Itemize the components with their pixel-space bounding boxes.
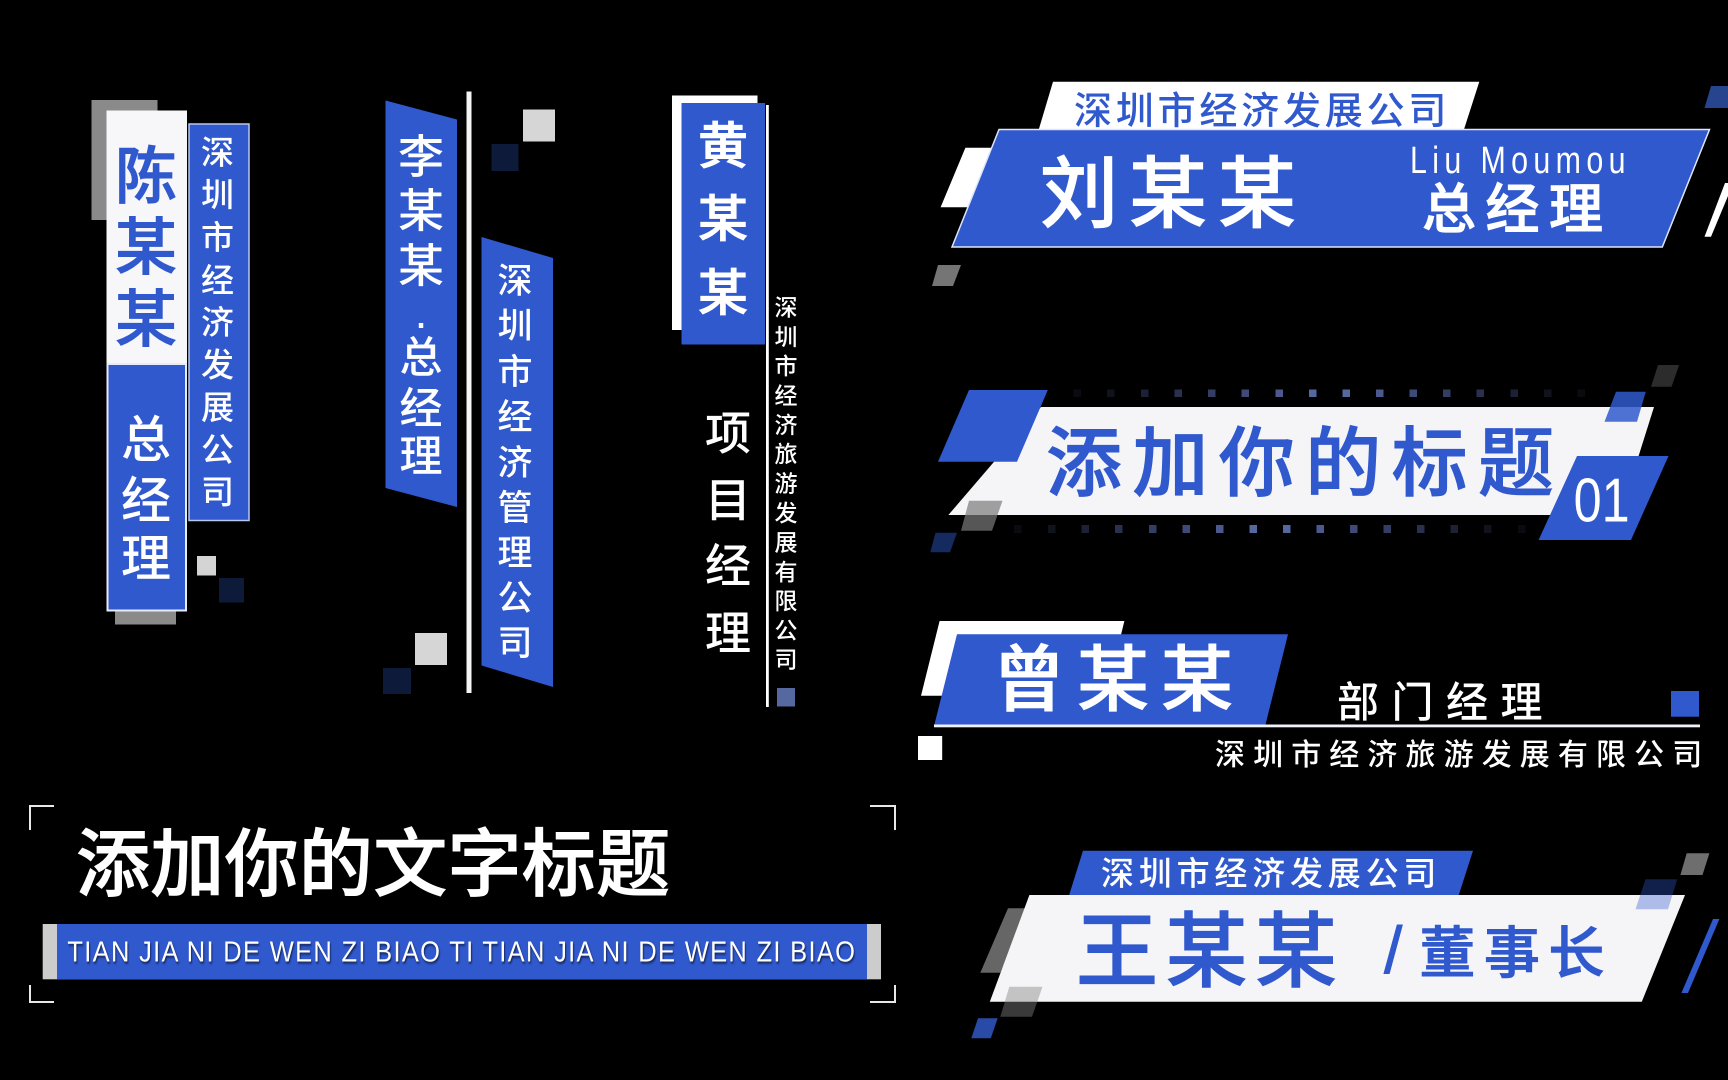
blue left block bbox=[938, 390, 1048, 462]
company blue block bbox=[189, 124, 249, 520]
white backing block bbox=[672, 96, 758, 330]
company banner bbox=[482, 237, 553, 687]
dark gray accent bbox=[1651, 365, 1679, 387]
heading text: 添加你的标题 bbox=[1046, 422, 1564, 507]
english name: Liu Moumou bbox=[1410, 140, 1631, 182]
company text: 深圳市经济旅游发展有限公司 bbox=[774, 294, 798, 672]
heading text: 添加你的文字标题 bbox=[76, 823, 670, 906]
title text: 部门经理 bbox=[1337, 679, 1555, 726]
company text: 深圳市经济发展公司 bbox=[201, 134, 234, 510]
company text: 深圳市经济管理公司 bbox=[497, 262, 533, 663]
company text: 深圳市经济发展公司 bbox=[1101, 855, 1441, 892]
gray small piece bbox=[932, 265, 961, 286]
panel: 添加你的标题 banner bbox=[930, 365, 1679, 552]
underline bbox=[934, 724, 1700, 727]
blue name banner bbox=[934, 634, 1288, 725]
translucent blue accent bbox=[1604, 392, 1646, 422]
white divider line bbox=[466, 92, 472, 693]
blue small accent bbox=[971, 1018, 998, 1038]
name text: 陈某某 bbox=[115, 143, 177, 355]
blue company tab bbox=[1069, 851, 1473, 896]
name text: 刘某某 bbox=[1040, 150, 1307, 238]
translucent gray accent bbox=[1000, 987, 1042, 1017]
number block bbox=[1539, 456, 1668, 540]
top dot row bbox=[1074, 390, 1585, 397]
bottom dark square bbox=[383, 668, 411, 694]
name text: 总经理 bbox=[400, 334, 442, 482]
bottom light square bbox=[415, 633, 447, 665]
gray backing block bbox=[92, 100, 158, 220]
name text: 黄某某 bbox=[698, 118, 748, 322]
top dark square bbox=[492, 144, 518, 171]
company text: 深圳市经济旅游发展有限公司 bbox=[1215, 739, 1710, 772]
panel: 曾某某 banner bbox=[918, 621, 1710, 772]
panel: 李某某 vertical card bbox=[383, 92, 555, 694]
title text: 项目经理 bbox=[705, 408, 751, 660]
dark blue accent bbox=[930, 533, 957, 552]
panel: 王某某 banner bbox=[971, 851, 1719, 1038]
panel: 黄某某 vertical card bbox=[672, 96, 798, 707]
white square bbox=[918, 736, 942, 760]
white backing shape bbox=[921, 621, 1124, 696]
white slash bbox=[1704, 183, 1728, 237]
corner brackets bbox=[30, 806, 895, 1002]
company text: 深圳市经济发展公司 bbox=[1074, 91, 1450, 133]
white divider line bbox=[766, 105, 769, 707]
blue slash bbox=[1681, 919, 1719, 993]
gray back piece bbox=[980, 908, 1028, 973]
blue name banner bbox=[386, 100, 457, 507]
title text: /董事长 bbox=[1384, 913, 1613, 987]
gray bar ends bbox=[43, 924, 881, 979]
blue bar bbox=[57, 924, 867, 979]
light square bbox=[197, 556, 216, 576]
gray top accent bbox=[1680, 853, 1709, 875]
title text: 总经理 bbox=[1422, 180, 1612, 240]
bottom gray strip bbox=[115, 611, 176, 624]
blue name block bbox=[682, 103, 765, 344]
white side piece bbox=[941, 148, 995, 207]
white company tab bbox=[1039, 82, 1479, 130]
translucent blue accent bbox=[1636, 879, 1677, 909]
blue square bbox=[1671, 691, 1699, 717]
name text: 曾某某 bbox=[993, 641, 1245, 721]
blue main banner bbox=[952, 130, 1710, 247]
panel: 陈某某 vertical card bbox=[92, 100, 249, 624]
white main banner bbox=[990, 895, 1685, 1002]
white name block bbox=[106, 110, 187, 364]
small blue-gray square bbox=[777, 688, 795, 706]
name text: 王某某 bbox=[1076, 907, 1345, 998]
dark square bbox=[219, 578, 244, 602]
number text: 01 bbox=[1574, 467, 1630, 536]
gray accent bbox=[961, 501, 1002, 531]
bottom dot row bbox=[1014, 525, 1526, 533]
panel: 文字标题 caption bbox=[30, 806, 895, 1002]
dark blue corner piece bbox=[1704, 86, 1728, 108]
pinyin text: TIAN JIA NI DE WEN ZI BIAO TI TIAN JIA NI DE WEN ZI BIAO bbox=[67, 935, 855, 968]
panel: 刘某某 banner bbox=[932, 82, 1728, 286]
top light square bbox=[523, 110, 555, 142]
name text: 李某某· bbox=[398, 131, 444, 348]
title text: 总经理 bbox=[121, 412, 171, 587]
blue title block bbox=[108, 364, 186, 610]
white main banner bbox=[948, 407, 1654, 515]
